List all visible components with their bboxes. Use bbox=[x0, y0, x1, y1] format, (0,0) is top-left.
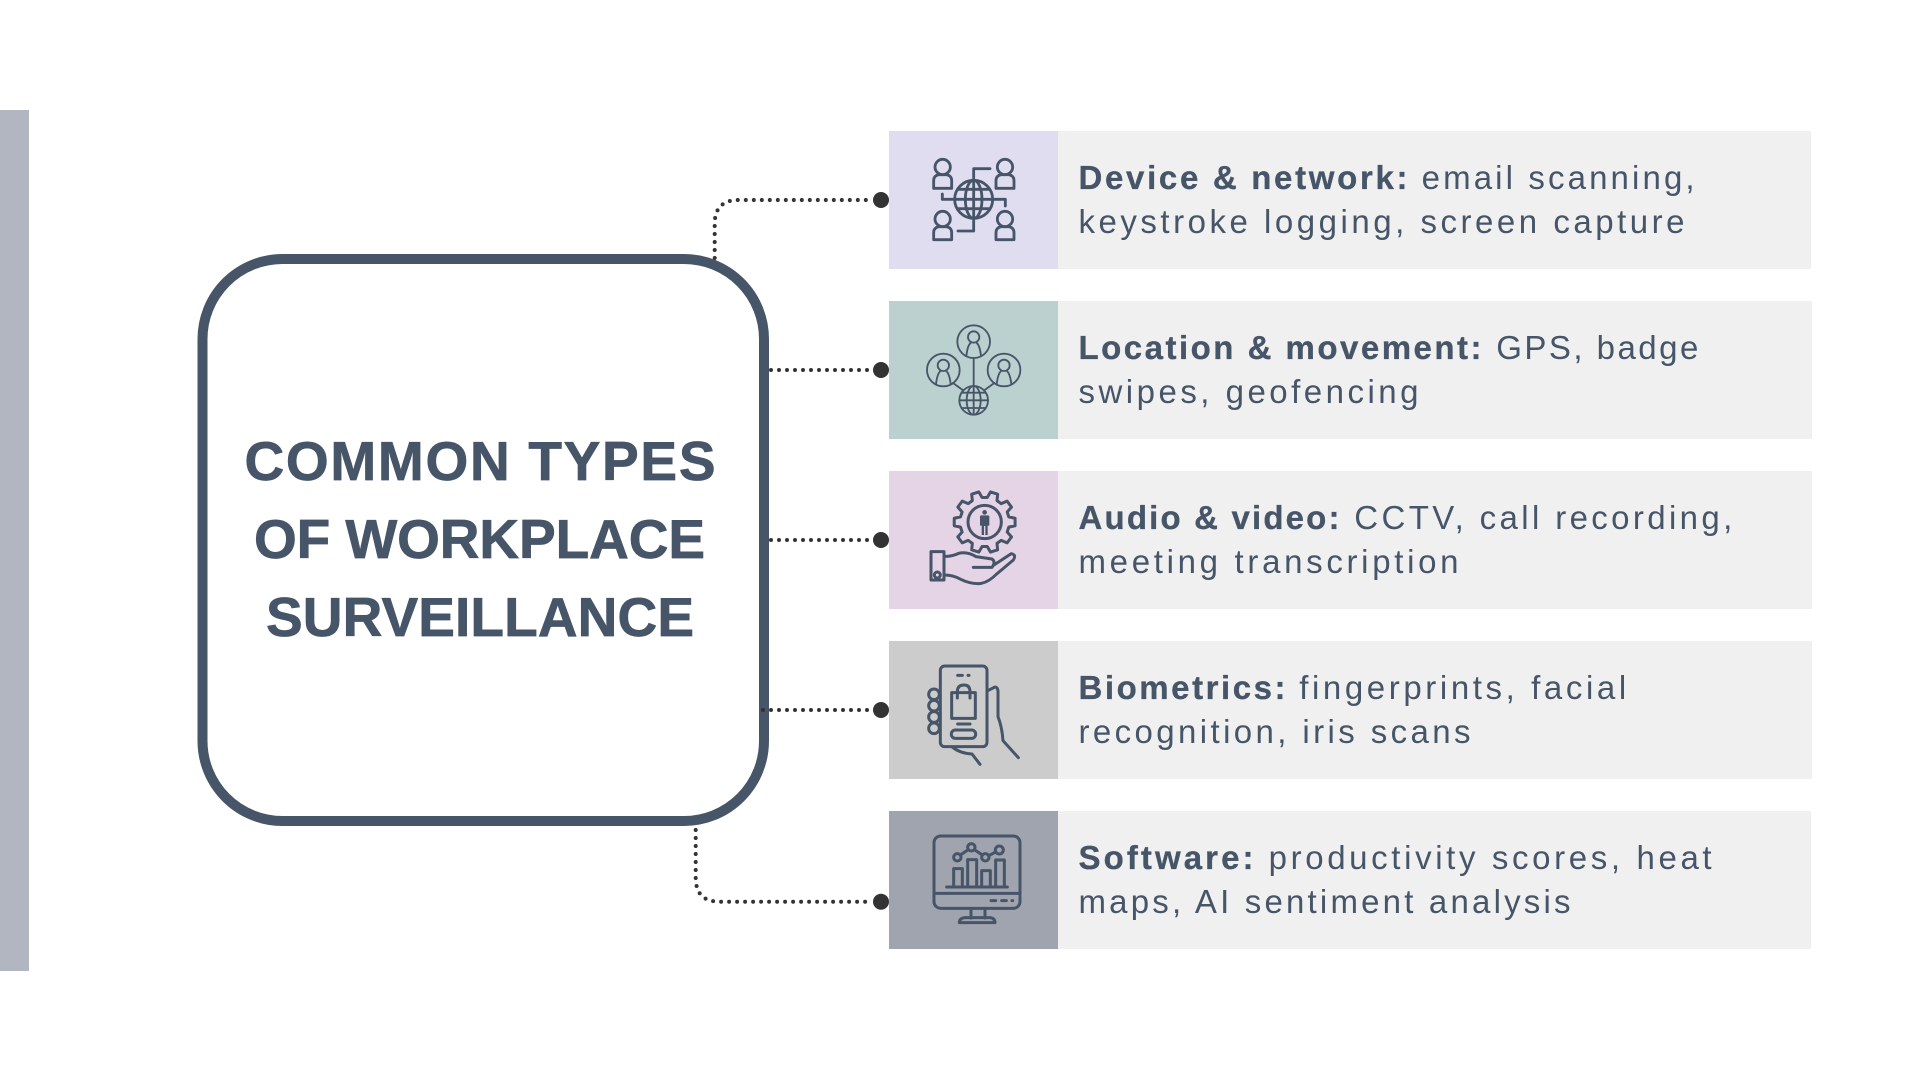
text: software: productivity scores, heat bbox=[1269, 839, 1712, 876]
text: location and movement bbox=[1078, 329, 1698, 410]
text: software: maps, AI sentiment analysis bbox=[1078, 883, 1570, 920]
text: audio and video: Audio & video: bbox=[1078, 499, 1340, 536]
central title panel bbox=[202, 259, 764, 821]
title: SURVEILLANCE bbox=[266, 586, 694, 648]
text: device and network: keystroke logging, screen capture bbox=[1078, 203, 1684, 240]
panel: audio and video bbox=[889, 471, 1812, 609]
text: location and movement: Location & movement: bbox=[1078, 329, 1482, 366]
icon: hand holding phone bbox=[929, 666, 1018, 764]
text: device and network: Device & network: bbox=[1078, 159, 1408, 196]
title: OF WORKPLACE bbox=[254, 508, 705, 570]
panel: biometrics bbox=[889, 641, 1812, 779]
text: device and network: email scanning, bbox=[1422, 159, 1695, 196]
text: device and network bbox=[1078, 159, 1695, 240]
panel: software bbox=[889, 811, 1811, 949]
icon: people around globe bbox=[934, 159, 1014, 240]
panel: device and network bbox=[889, 131, 1811, 269]
text: biometrics: recognition, iris scans bbox=[1078, 713, 1470, 750]
text: biometrics: fingerprints, facial bbox=[1299, 669, 1626, 706]
connector: row 1 bbox=[715, 192, 889, 258]
text: location and movement: GPS, badge bbox=[1496, 329, 1698, 366]
text: biometrics bbox=[1078, 669, 1626, 750]
text: biometrics: Biometrics: bbox=[1078, 669, 1286, 706]
connector: row 5 bbox=[696, 830, 889, 910]
icon: monitor with charts bbox=[934, 836, 1020, 923]
left accent bar bbox=[0, 110, 29, 971]
text: audio and video: meeting transcription bbox=[1078, 543, 1458, 580]
icon: gear with person in hand bbox=[931, 492, 1015, 584]
text: audio and video: CCTV, call recording, bbox=[1354, 499, 1732, 536]
connector: row 4 bbox=[763, 702, 889, 718]
text: software: Software: bbox=[1078, 839, 1254, 876]
connector: row 3 bbox=[771, 532, 889, 548]
text: audio and video bbox=[1078, 499, 1732, 580]
panel: location and movement bbox=[889, 301, 1812, 439]
connector: row 2 bbox=[771, 362, 889, 378]
icon: connected people and globe bbox=[927, 325, 1020, 415]
title bbox=[244, 430, 716, 648]
title: COMMON TYPES bbox=[244, 430, 716, 492]
text: software bbox=[1078, 839, 1712, 920]
text: location and movement: swipes, geofencing bbox=[1078, 373, 1418, 410]
